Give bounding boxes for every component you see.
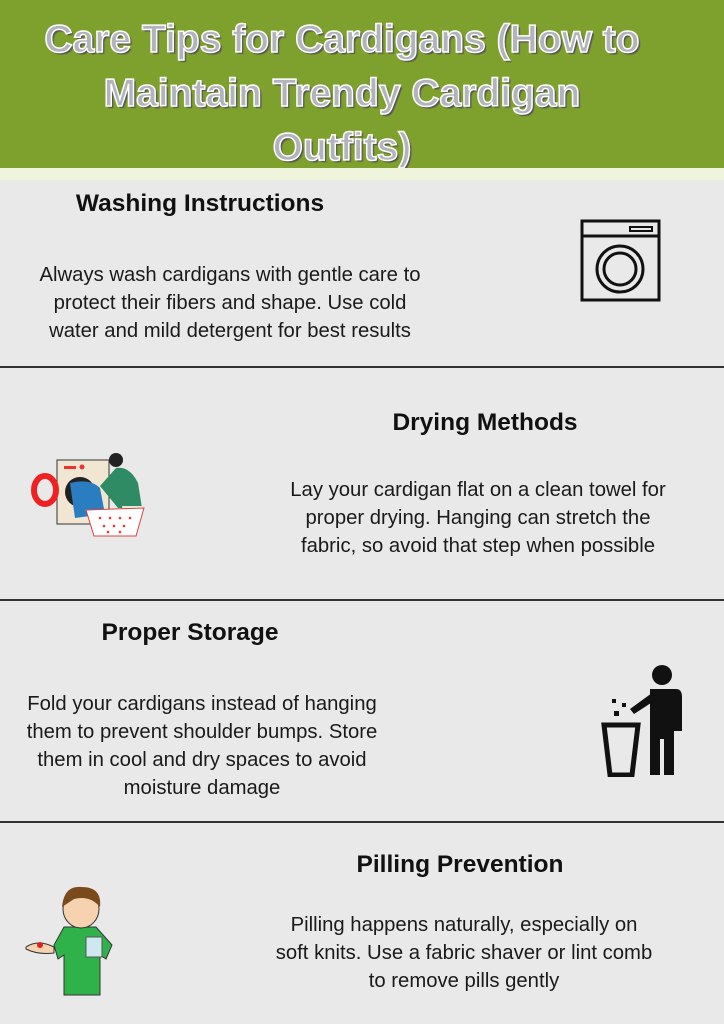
text: storage: them to prevent shoulder bumps. Store: [27, 721, 377, 743]
panel: pilling: [26, 851, 652, 996]
icon: washing machine: [580, 220, 660, 302]
text: washing: protect their fibers and shape. Use cold: [54, 292, 406, 314]
heading: washing: Washing Instructions: [76, 190, 324, 217]
heading: drying: Drying Methods: [392, 409, 578, 436]
title banner: Care Tips for Cardigans (How to: [44, 18, 640, 61]
icon: boy with glass: [26, 886, 112, 996]
text: drying: proper drying. Hanging can stretch the: [306, 507, 650, 529]
text: pilling: Pilling happens naturally, especially on: [291, 914, 637, 936]
text: storage: [27, 693, 377, 799]
text: storage: them in cool and dry spaces to avoid: [37, 749, 367, 771]
icon: person loading washer: [31, 453, 145, 536]
panel: washing: [39, 190, 660, 342]
heading: storage: Proper Storage: [102, 619, 278, 646]
icon: person with trash bin: [601, 665, 682, 777]
title banner: [0, 0, 724, 168]
text: pilling: soft knits. Use a fabric shaver or lint comb: [276, 942, 652, 964]
text: storage: Fold your cardigans instead of hanging: [27, 693, 377, 715]
panel: storage: [27, 619, 682, 799]
text: drying: fabric, so avoid that step when possible: [301, 535, 655, 557]
text: pilling: to remove pills gently: [369, 970, 559, 992]
text: drying: Lay your cardigan flat on a clean towel for: [290, 479, 666, 501]
heading: pilling: Pilling Prevention: [357, 851, 563, 878]
text: washing: [39, 264, 421, 342]
text: storage: moisture damage: [124, 777, 280, 799]
text: washing: water and mild detergent for best results: [49, 320, 411, 342]
title banner: Maintain Trendy Cardigan: [104, 72, 580, 115]
title banner: Outfits): [273, 126, 411, 169]
panel: drying: [31, 409, 666, 557]
text: washing: Always wash cardigans with gentle care to: [39, 264, 421, 286]
text: drying: [290, 479, 666, 557]
text: pilling: [276, 914, 652, 992]
